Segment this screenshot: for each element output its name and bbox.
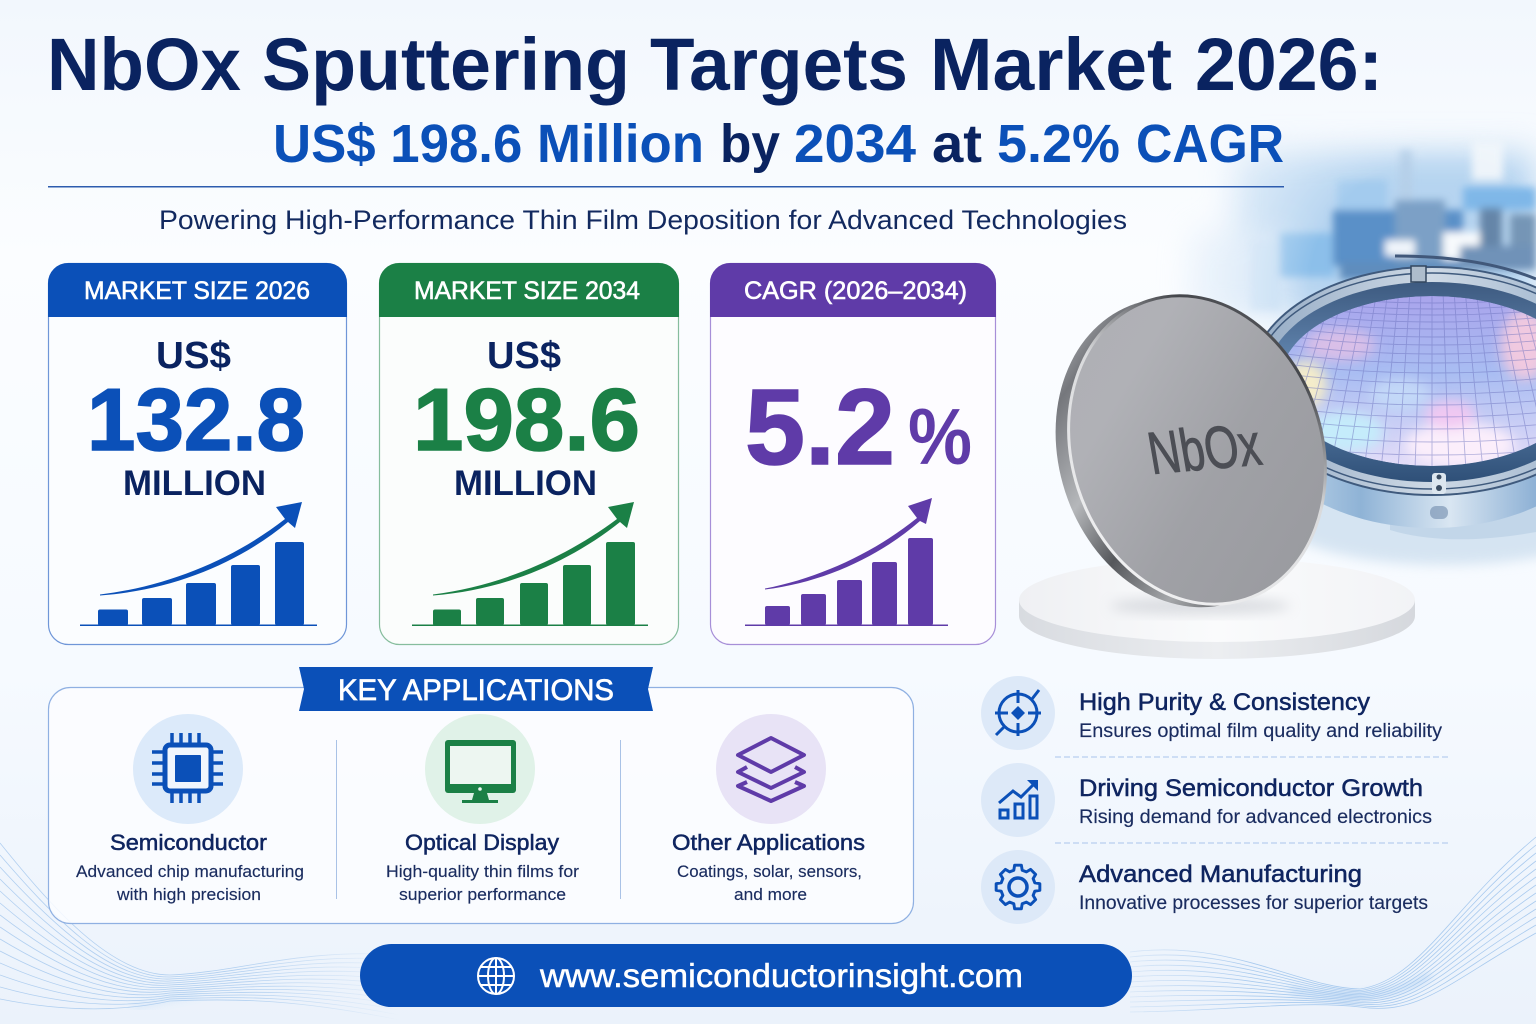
subtitle: CAGR [1136, 114, 1284, 174]
card heading: CAGR (2026–2034) [744, 277, 967, 305]
tagline: Powering High-Performance Thin Film Deposition for Advanced Technologies [159, 205, 1127, 235]
benefit text: Ensures optimal film quality and reliability [1079, 721, 1443, 742]
value: 5.2 [745, 366, 895, 487]
application heading: Semiconductor [110, 830, 267, 855]
icon: NbOx target on pedestal [1017, 262, 1415, 659]
application text: High-quality thin films for [386, 862, 579, 881]
application text: and more [734, 885, 807, 904]
icon: gear [981, 850, 1055, 924]
bar chart [80, 502, 317, 626]
unit: MILLION [454, 464, 597, 503]
card heading: MARKET SIZE 2026 [84, 277, 310, 305]
chuck lower body [1390, 500, 1536, 539]
icon: target [981, 676, 1055, 750]
chuck rings [1249, 266, 1536, 528]
title: Targets [650, 23, 908, 106]
subtitle [273, 114, 1284, 174]
unit: MILLION [123, 464, 266, 503]
equipment backdrop [1180, 140, 1536, 320]
title: Market [930, 23, 1172, 106]
benefit text: Innovative processes for superior targets [1079, 893, 1428, 914]
application text: with high precision [116, 885, 261, 904]
footer website pill [360, 944, 1132, 1007]
disc [1017, 262, 1364, 641]
chamber rear arc [1395, 256, 1536, 279]
value: 132.8 [87, 370, 305, 469]
currency: US$ [156, 335, 231, 377]
benefit: advanced manufacturing [981, 850, 1428, 924]
icon: chip [133, 714, 243, 824]
value: 198.6 [413, 370, 640, 469]
benefit: high purity [981, 676, 1443, 750]
title: 2026: [1195, 23, 1383, 106]
subtitle: by [720, 114, 780, 174]
application text: Advanced chip manufacturing [76, 862, 304, 881]
title [47, 23, 1383, 106]
bar chart [412, 502, 648, 626]
banner [299, 667, 653, 711]
disc label: NbOx [1143, 411, 1266, 487]
clamp bottom [1432, 473, 1446, 494]
wave lines bottom right [1130, 837, 1536, 1012]
title: Sputtering [262, 23, 630, 106]
icon: layers [716, 714, 826, 824]
lower body shadow [1275, 465, 1536, 565]
subtitle: at [932, 114, 982, 174]
icon: growth chart [981, 763, 1055, 837]
silicon wafer [1288, 296, 1536, 466]
bar chart [745, 498, 948, 626]
pedestal [1019, 558, 1415, 659]
title: NbOx [47, 23, 241, 106]
benefit: semiconductor growth [981, 763, 1432, 837]
icon: globe [478, 958, 514, 994]
application text: superior performance [399, 885, 566, 904]
currency: US$ [487, 335, 561, 377]
card header [379, 263, 679, 317]
panel: key applications [48, 667, 914, 924]
panel: market size 2026 [48, 263, 347, 644]
icon: equipment and wafer photo [1180, 140, 1536, 565]
panel: CAGR [710, 263, 996, 644]
icon: monitor [425, 714, 535, 824]
benefit heading: High Purity & Consistency [1079, 689, 1370, 716]
benefit heading: Driving Semiconductor Growth [1079, 775, 1423, 802]
panel: market size 2034 [379, 263, 679, 644]
subtitle: 2034 [794, 114, 916, 174]
benefit heading: Advanced Manufacturing [1079, 861, 1362, 888]
card header [48, 263, 347, 317]
card header [710, 263, 996, 317]
clamp top [1411, 266, 1426, 282]
subtitle: US$ 198.6 Million [273, 114, 704, 174]
website: www.semiconductorinsight.com [539, 957, 1023, 994]
percent sign: % [908, 392, 972, 481]
application heading: Optical Display [405, 830, 559, 855]
wave lines bottom left [0, 843, 400, 1020]
card heading: MARKET SIZE 2034 [414, 277, 640, 305]
application heading: Other Applications [672, 830, 865, 855]
banner text: KEY APPLICATIONS [338, 674, 614, 707]
subtitle: 5.2% [997, 114, 1120, 174]
benefit text: Rising demand for advanced electronics [1079, 807, 1432, 828]
application text: Coatings, solar, sensors, [677, 862, 862, 881]
